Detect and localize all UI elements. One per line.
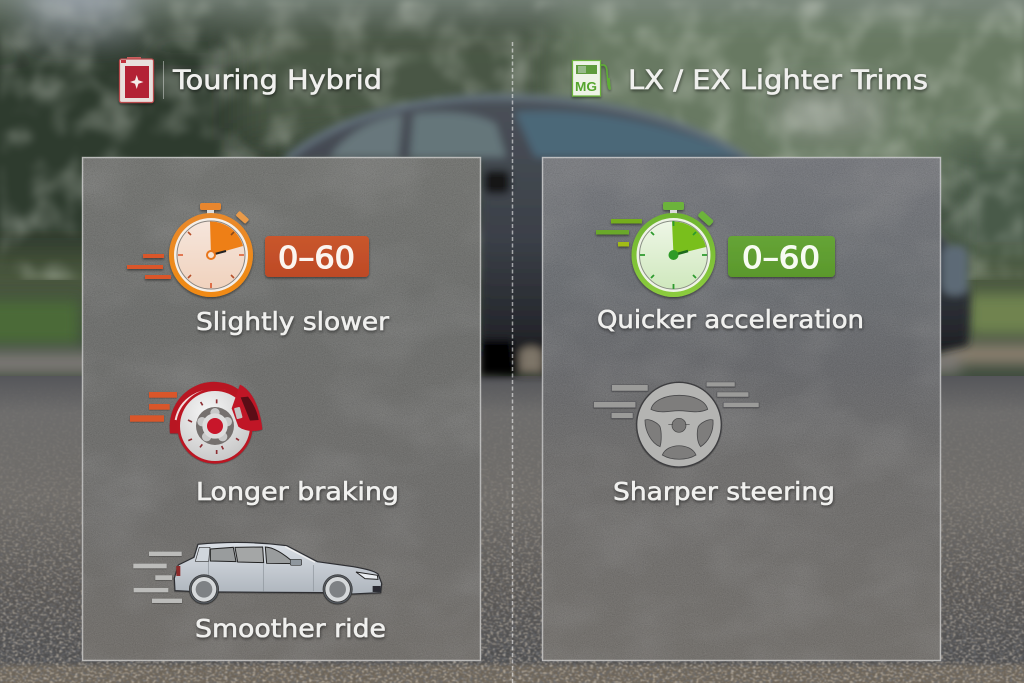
speed lines (594, 382, 759, 418)
label: Slightly slower: Slightly slower (196, 307, 390, 336)
panel: LX / EX Lighter Trims (542, 157, 941, 661)
panel: Touring Hybrid (82, 157, 481, 661)
label: Smoother ride: Smoother ride (195, 614, 386, 643)
heading: LX / EX Lighter Trims: LX / EX Lighter Trims (628, 65, 928, 96)
icon: silver car (133, 542, 382, 604)
icon: green fuel pump (572, 60, 610, 96)
icon: orange stopwatch (127, 203, 253, 297)
icon: steering wheel (594, 382, 759, 467)
badge: 0-60 green (728, 236, 835, 277)
badge: 0-60 green: 0–60 (742, 241, 820, 276)
icon: red battery (120, 57, 154, 102)
badge: 0-60 orange (265, 236, 369, 277)
icon: red brake disc (130, 382, 262, 464)
speed lines (130, 392, 177, 422)
icon: green fuel pump: MG (575, 79, 597, 94)
center dashed divider (512, 42, 514, 683)
speed lines (596, 219, 642, 246)
heading: Touring Hybrid: Touring Hybrid (172, 65, 382, 96)
car silhouette (285, 97, 970, 376)
icon: green stopwatch (596, 202, 716, 297)
speed lines (133, 552, 182, 603)
badge: 0-60 orange: 0–60 (278, 241, 355, 276)
label: Longer braking: Longer braking (196, 477, 399, 506)
heading divider (162, 61, 164, 99)
label: Quicker acceleration: Quicker acceleration (597, 305, 864, 334)
label: Sharper steering: Sharper steering (613, 477, 835, 506)
speed lines (127, 254, 171, 279)
